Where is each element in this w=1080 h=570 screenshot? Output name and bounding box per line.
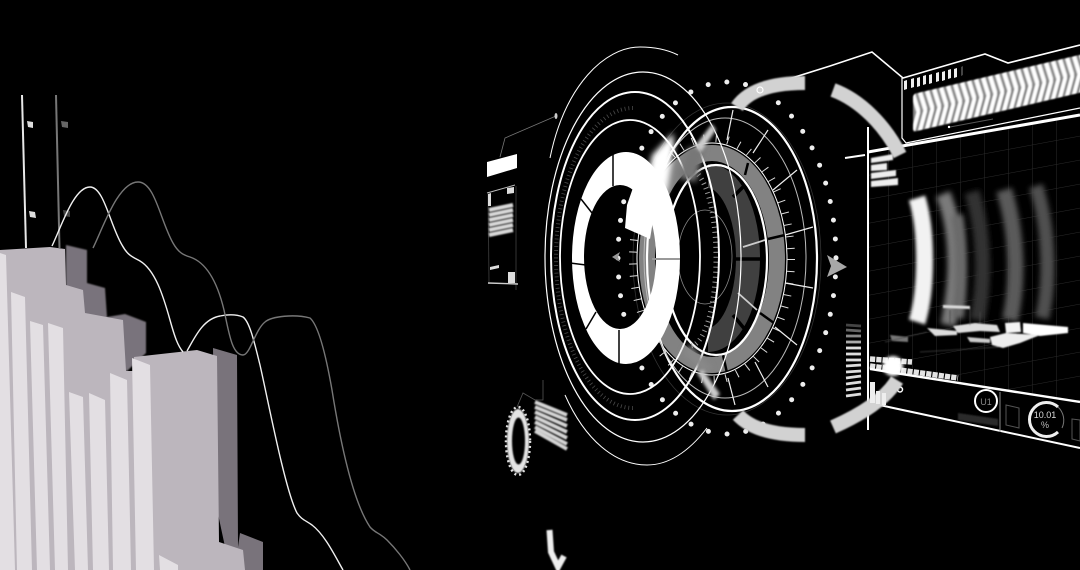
connector dot — [554, 113, 558, 119]
bar chart: 3D bars with line curves — [0, 95, 410, 570]
gauge: 10.01 percent — [1029, 402, 1064, 437]
white donut — [570, 152, 680, 366]
streak: light lower — [697, 370, 720, 400]
streak: gray lower — [682, 345, 712, 374]
panel frame lines — [845, 115, 1080, 448]
stripes — [535, 402, 567, 449]
line curve: white — [52, 187, 343, 570]
dark gauge inner segments — [708, 176, 748, 340]
gray arcs bracket — [737, 83, 900, 435]
small stacked labels — [871, 154, 898, 187]
radial dividers — [727, 110, 813, 405]
bottom L glyph — [550, 530, 564, 567]
stripes block — [489, 205, 513, 235]
fine tick arc — [556, 108, 633, 408]
band dividers — [723, 163, 785, 373]
bar shadows — [66, 245, 263, 570]
donut segment cuts — [570, 152, 619, 366]
streak: light upper — [695, 124, 716, 152]
vertical scale bars — [846, 325, 861, 396]
panel data tiles — [870, 359, 958, 378]
ring lines — [633, 103, 821, 415]
tick ring — [633, 138, 791, 380]
line curve: gray — [93, 182, 410, 570]
corner glow and bars — [870, 356, 903, 405]
arrow marker — [827, 255, 847, 277]
motion blur streaks — [645, 124, 720, 400]
white inner spokes — [738, 240, 765, 310]
panel grid — [869, 115, 1080, 402]
right panel: screen — [760, 45, 1080, 448]
right ring system — [618, 82, 847, 434]
streak: gray fan upper — [678, 146, 705, 182]
glow blob — [883, 356, 903, 376]
gear body — [507, 409, 529, 473]
small bars — [870, 382, 886, 405]
small status ticks — [904, 66, 963, 90]
center marker — [612, 252, 620, 262]
hatched gray band — [647, 153, 777, 365]
back bar blocks — [0, 247, 245, 570]
left data panel — [487, 113, 558, 290]
gear teeth — [506, 407, 530, 475]
lower stripes panel — [517, 380, 567, 449]
outlined boxes — [1006, 405, 1080, 441]
dots ring — [618, 82, 836, 434]
small ring marker — [898, 387, 902, 392]
inner tick arc — [690, 170, 716, 346]
connector — [517, 380, 543, 407]
streak: white upper — [645, 133, 674, 192]
donut notch — [625, 182, 658, 239]
connector line — [500, 116, 556, 157]
gauge bar — [958, 413, 998, 426]
gauge: 10.01 percent: 10.01 — [1034, 410, 1056, 420]
gauge: U1 — [975, 390, 997, 412]
gauge: 10.01 percent: % — [1041, 420, 1049, 430]
outer arc: bottom — [565, 395, 707, 465]
gear icon — [506, 407, 530, 475]
main rings — [560, 120, 700, 394]
chart axis lines — [22, 95, 70, 248]
gauge: U1: U1 — [980, 397, 992, 407]
left ring system — [545, 47, 741, 465]
outer arc: top — [550, 47, 678, 158]
chevron band — [913, 54, 1080, 132]
panel frame — [487, 185, 518, 290]
arc anchor dot — [757, 87, 763, 93]
light bar strips — [0, 253, 178, 570]
top frame outline — [760, 45, 1080, 88]
panel blurred arcs — [917, 186, 1047, 325]
small indicator line — [950, 119, 993, 127]
black inner segment dividers — [733, 180, 770, 338]
white header bar — [487, 154, 517, 177]
donut ring — [572, 152, 680, 364]
donut crossbar — [652, 258, 680, 260]
panel 3D city map — [885, 305, 1068, 352]
white corner marks — [488, 187, 515, 283]
